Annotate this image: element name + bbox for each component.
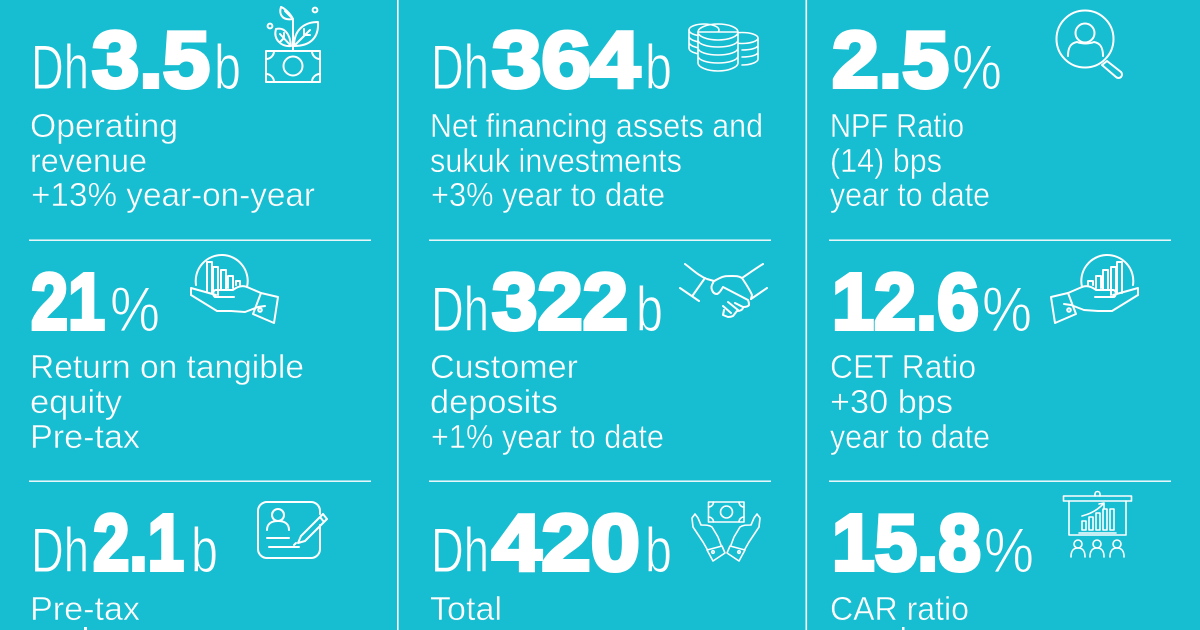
metric: Dh3.5b: Dh: [31, 33, 89, 103]
metric: Dh3.5b: 3.5: [92, 15, 210, 104]
icon: handshake: [680, 264, 767, 317]
panel: CAR ratio: [830, 492, 1132, 627]
label: return on tangible equity: Return on tangible: [30, 348, 304, 385]
metric: 12.6%: %: [982, 275, 1032, 345]
metric: 21%: %: [110, 275, 160, 345]
panel: net financing assets and sukuk investments: [430, 15, 763, 213]
icon: signing document: [258, 502, 327, 558]
label: operating revenue: Operating: [30, 107, 178, 144]
label: operating revenue: revenue: [30, 142, 147, 179]
label: customer deposits: [430, 348, 664, 455]
panel: return on tangible equity: [30, 255, 304, 455]
label: return on tangible equity: Pre-tax: [30, 418, 141, 455]
metric: Dh322b: b: [636, 275, 663, 345]
metric: Dh420b: b: [645, 516, 672, 586]
label: operating revenue: +13% year-on-year: [31, 176, 315, 213]
metric: Dh2.1b: [31, 498, 218, 587]
panel: operating revenue: [30, 7, 320, 213]
label: customer deposits: Customer: [430, 348, 578, 385]
panel: pre-tax profit: [30, 498, 327, 627]
label: CET ratio: year to date: [830, 418, 990, 455]
metric: 15.8%: %: [984, 516, 1034, 586]
label: CAR ratio: CAR ratio: [830, 590, 969, 627]
metric: 21%: 21: [31, 257, 105, 346]
label: pre-tax: Pre-tax: [30, 590, 141, 627]
metric: Dh2.1b: 2.1: [93, 498, 184, 587]
label: NPF ratio: (14) bps: [830, 142, 942, 179]
label: return on tangible equity: [30, 348, 304, 455]
icon: hand holding rising chart: [1051, 255, 1138, 323]
metric: Dh364b: b: [645, 33, 672, 103]
label: NPF ratio: NPF Ratio: [830, 107, 964, 144]
metric: Dh420b: Dh: [431, 516, 489, 586]
icon: magnifier over person: [1056, 10, 1122, 78]
panel: customer deposits: [430, 257, 767, 455]
metric: Dh2.1b: b: [191, 516, 218, 586]
label: net financing assets and sukuk investments: Net financing assets and: [430, 107, 763, 144]
metric: Dh3.5b: [31, 15, 241, 104]
metric: 15.8%: 15.8: [832, 498, 981, 587]
icon: hand holding falling chart: [191, 255, 278, 323]
metric: 2.5%: %: [952, 33, 1002, 103]
label: net financing assets and sukuk investments: +3% year to date: [431, 176, 665, 213]
icon: presentation board with audience: [1064, 492, 1132, 557]
metric: Dh322b: 322: [492, 257, 628, 346]
label: net financing assets and sukuk investments: [430, 107, 763, 213]
icon: stacks of coins: [689, 24, 758, 71]
metric: Dh2.1b: Dh: [31, 516, 89, 586]
icon: plant growing from banknote: [266, 7, 320, 82]
panel: CET ratio: [830, 255, 1138, 455]
label: customer deposits: +1% year to date: [431, 418, 664, 455]
label: operating revenue: [30, 107, 315, 213]
label: total: Total: [430, 590, 502, 627]
metric: Dh322b: Dh: [431, 275, 489, 345]
metric: Dh364b: Dh: [431, 33, 489, 103]
metric: 2.5%: [832, 15, 1002, 104]
metric: Dh420b: 420: [492, 498, 640, 587]
label: NPF ratio: [830, 107, 990, 213]
panel: total assets: [430, 498, 760, 627]
icon: hands holding banknote: [692, 502, 760, 561]
metric: Dh364b: [431, 15, 672, 104]
metric: Dh420b: [431, 498, 672, 587]
label: CET ratio: [830, 348, 990, 455]
panel: NPF ratio: [830, 10, 1122, 213]
metric: 21%: [31, 257, 160, 346]
metric: Dh3.5b: b: [214, 33, 241, 103]
label: CET ratio: +30 bps: [830, 383, 953, 420]
label: net financing assets and sukuk investments: sukuk investments: [430, 142, 682, 179]
label: CET ratio: CET Ratio: [830, 348, 976, 385]
label: customer deposits: deposits: [430, 383, 558, 420]
metric: Dh322b: [431, 257, 663, 346]
metric: 2.5%: 2.5: [832, 15, 949, 104]
metric: Dh364b: 364: [492, 15, 641, 104]
label: NPF ratio: year to date: [830, 176, 990, 213]
metric: 12.6%: 12.6: [832, 257, 979, 346]
label: return on tangible equity: equity: [30, 383, 123, 420]
